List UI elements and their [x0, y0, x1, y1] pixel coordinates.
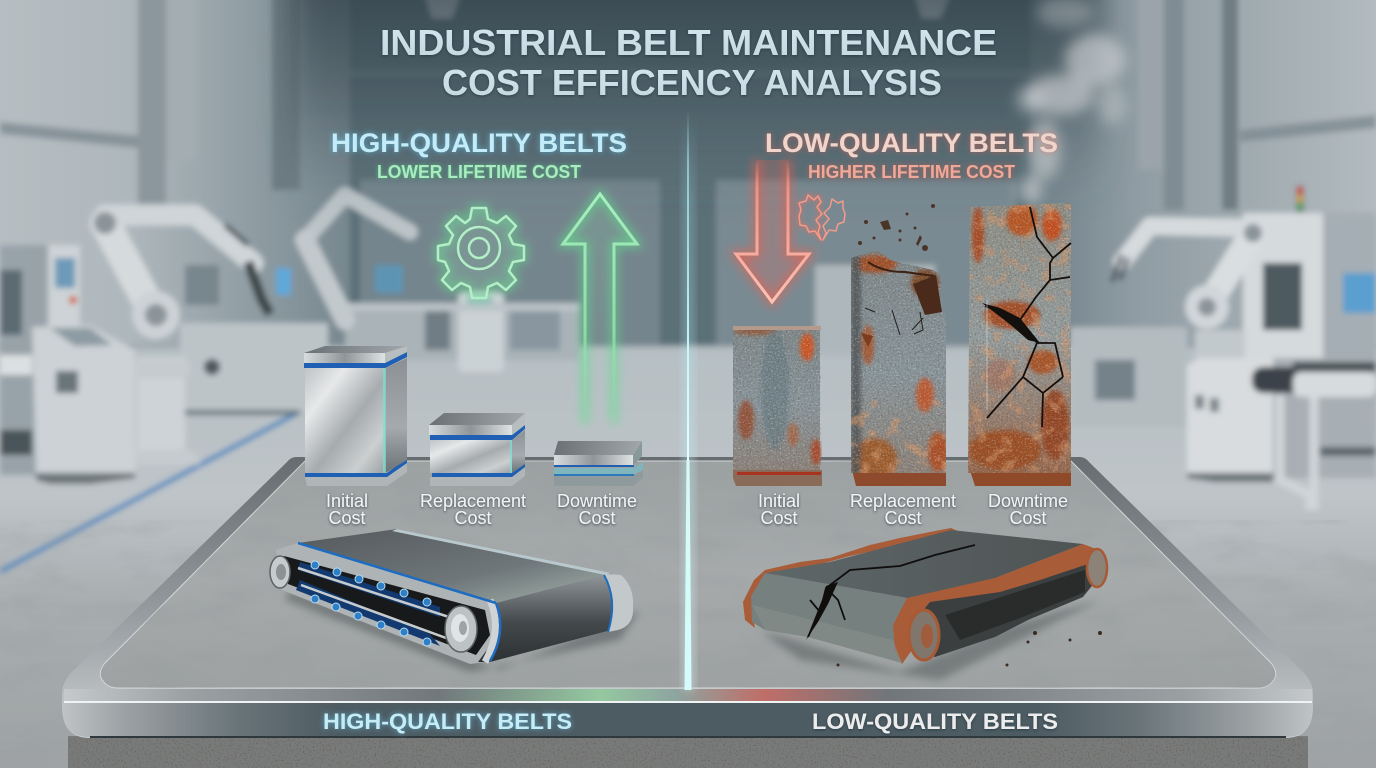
platform rim: [62, 457, 1313, 738]
bar: low-quality initial cost: [733, 326, 822, 486]
platform base concrete: [68, 736, 1308, 768]
floor texture: [0, 520, 1376, 768]
bar: high-quality replacement cost: [429, 413, 525, 486]
bar: high-quality initial cost: [304, 346, 407, 486]
label: initial cost: Cost: [760, 508, 798, 528]
belt top surface: [765, 530, 1083, 598]
bar: low-quality replacement cost: [851, 250, 948, 486]
label: replacement cost: Cost: [454, 508, 492, 528]
belt side frame: [276, 543, 501, 664]
belt top surface: [298, 529, 611, 603]
bar chart: high-quality belts: [304, 346, 643, 528]
heading: title: COST EFFICENCY ANALYSIS: [442, 62, 942, 103]
belt roller: [478, 573, 633, 662]
subheading: higher lifetime cost: HIGHER LIFETIME COST: [808, 162, 1015, 182]
label: initial cost: Initial: [758, 491, 800, 511]
belt shadow: [760, 600, 1100, 680]
platform surface: [100, 461, 1276, 688]
bar chart: low-quality belts: [733, 203, 1072, 528]
belt interior: [915, 557, 1099, 657]
belt front roll: [751, 573, 907, 663]
heading: title: [380, 22, 997, 103]
bar: low-quality downtime cost: [968, 203, 1072, 486]
subheading: lower lifetime cost: LOWER LIFETIME COST: [377, 162, 581, 182]
arrow: green up arrow: [563, 194, 637, 423]
label: downtime cost: Cost: [578, 508, 616, 528]
rim reflection strip: [64, 689, 1312, 702]
footer label: high-quality belts: HIGH-QUALITY BELTS: [323, 709, 572, 734]
label band: [63, 703, 1312, 737]
footer label: low-quality belts: LOW-QUALITY BELTS: [812, 709, 1058, 734]
debris fragments: [858, 204, 935, 251]
arrow: red down arrow: [736, 160, 809, 302]
icon: broken red gear: [799, 195, 845, 240]
smoke plume: [1016, 0, 1126, 204]
centre divider line: [682, 110, 695, 690]
label: initial cost: Initial: [326, 491, 368, 511]
belt: high-quality conveyor: [270, 529, 640, 672]
heading: title: INDUSTRIAL BELT MAINTENANCE: [380, 22, 997, 63]
label: downtime cost: Downtime: [988, 491, 1068, 511]
debris on surface: [836, 631, 1102, 666]
title backdrop shading: [290, 0, 1100, 200]
label: downtime cost: Cost: [1009, 508, 1047, 528]
belt crack: [808, 545, 975, 637]
belt: low-quality damaged conveyor: [743, 528, 1107, 680]
heading: low-quality belts: LOW-QUALITY BELTS: [765, 128, 1058, 158]
belt pulleys: [270, 556, 290, 588]
label: initial cost: Cost: [328, 508, 366, 528]
bar: high-quality downtime cost: [554, 441, 643, 486]
belt frayed edges: [743, 528, 960, 628]
belt front roller: [909, 610, 939, 660]
label: replacement cost: Cost: [884, 508, 922, 528]
belt shadow: [285, 590, 640, 672]
belt rear roller: [1087, 549, 1107, 587]
platform: [62, 457, 1313, 768]
heading: high-quality belts: HIGH-QUALITY BELTS: [331, 128, 627, 158]
icon: green gear: [438, 208, 524, 298]
label: replacement cost: Replacement: [420, 491, 526, 511]
label: downtime cost: Downtime: [557, 491, 637, 511]
label: replacement cost: Replacement: [850, 491, 956, 511]
